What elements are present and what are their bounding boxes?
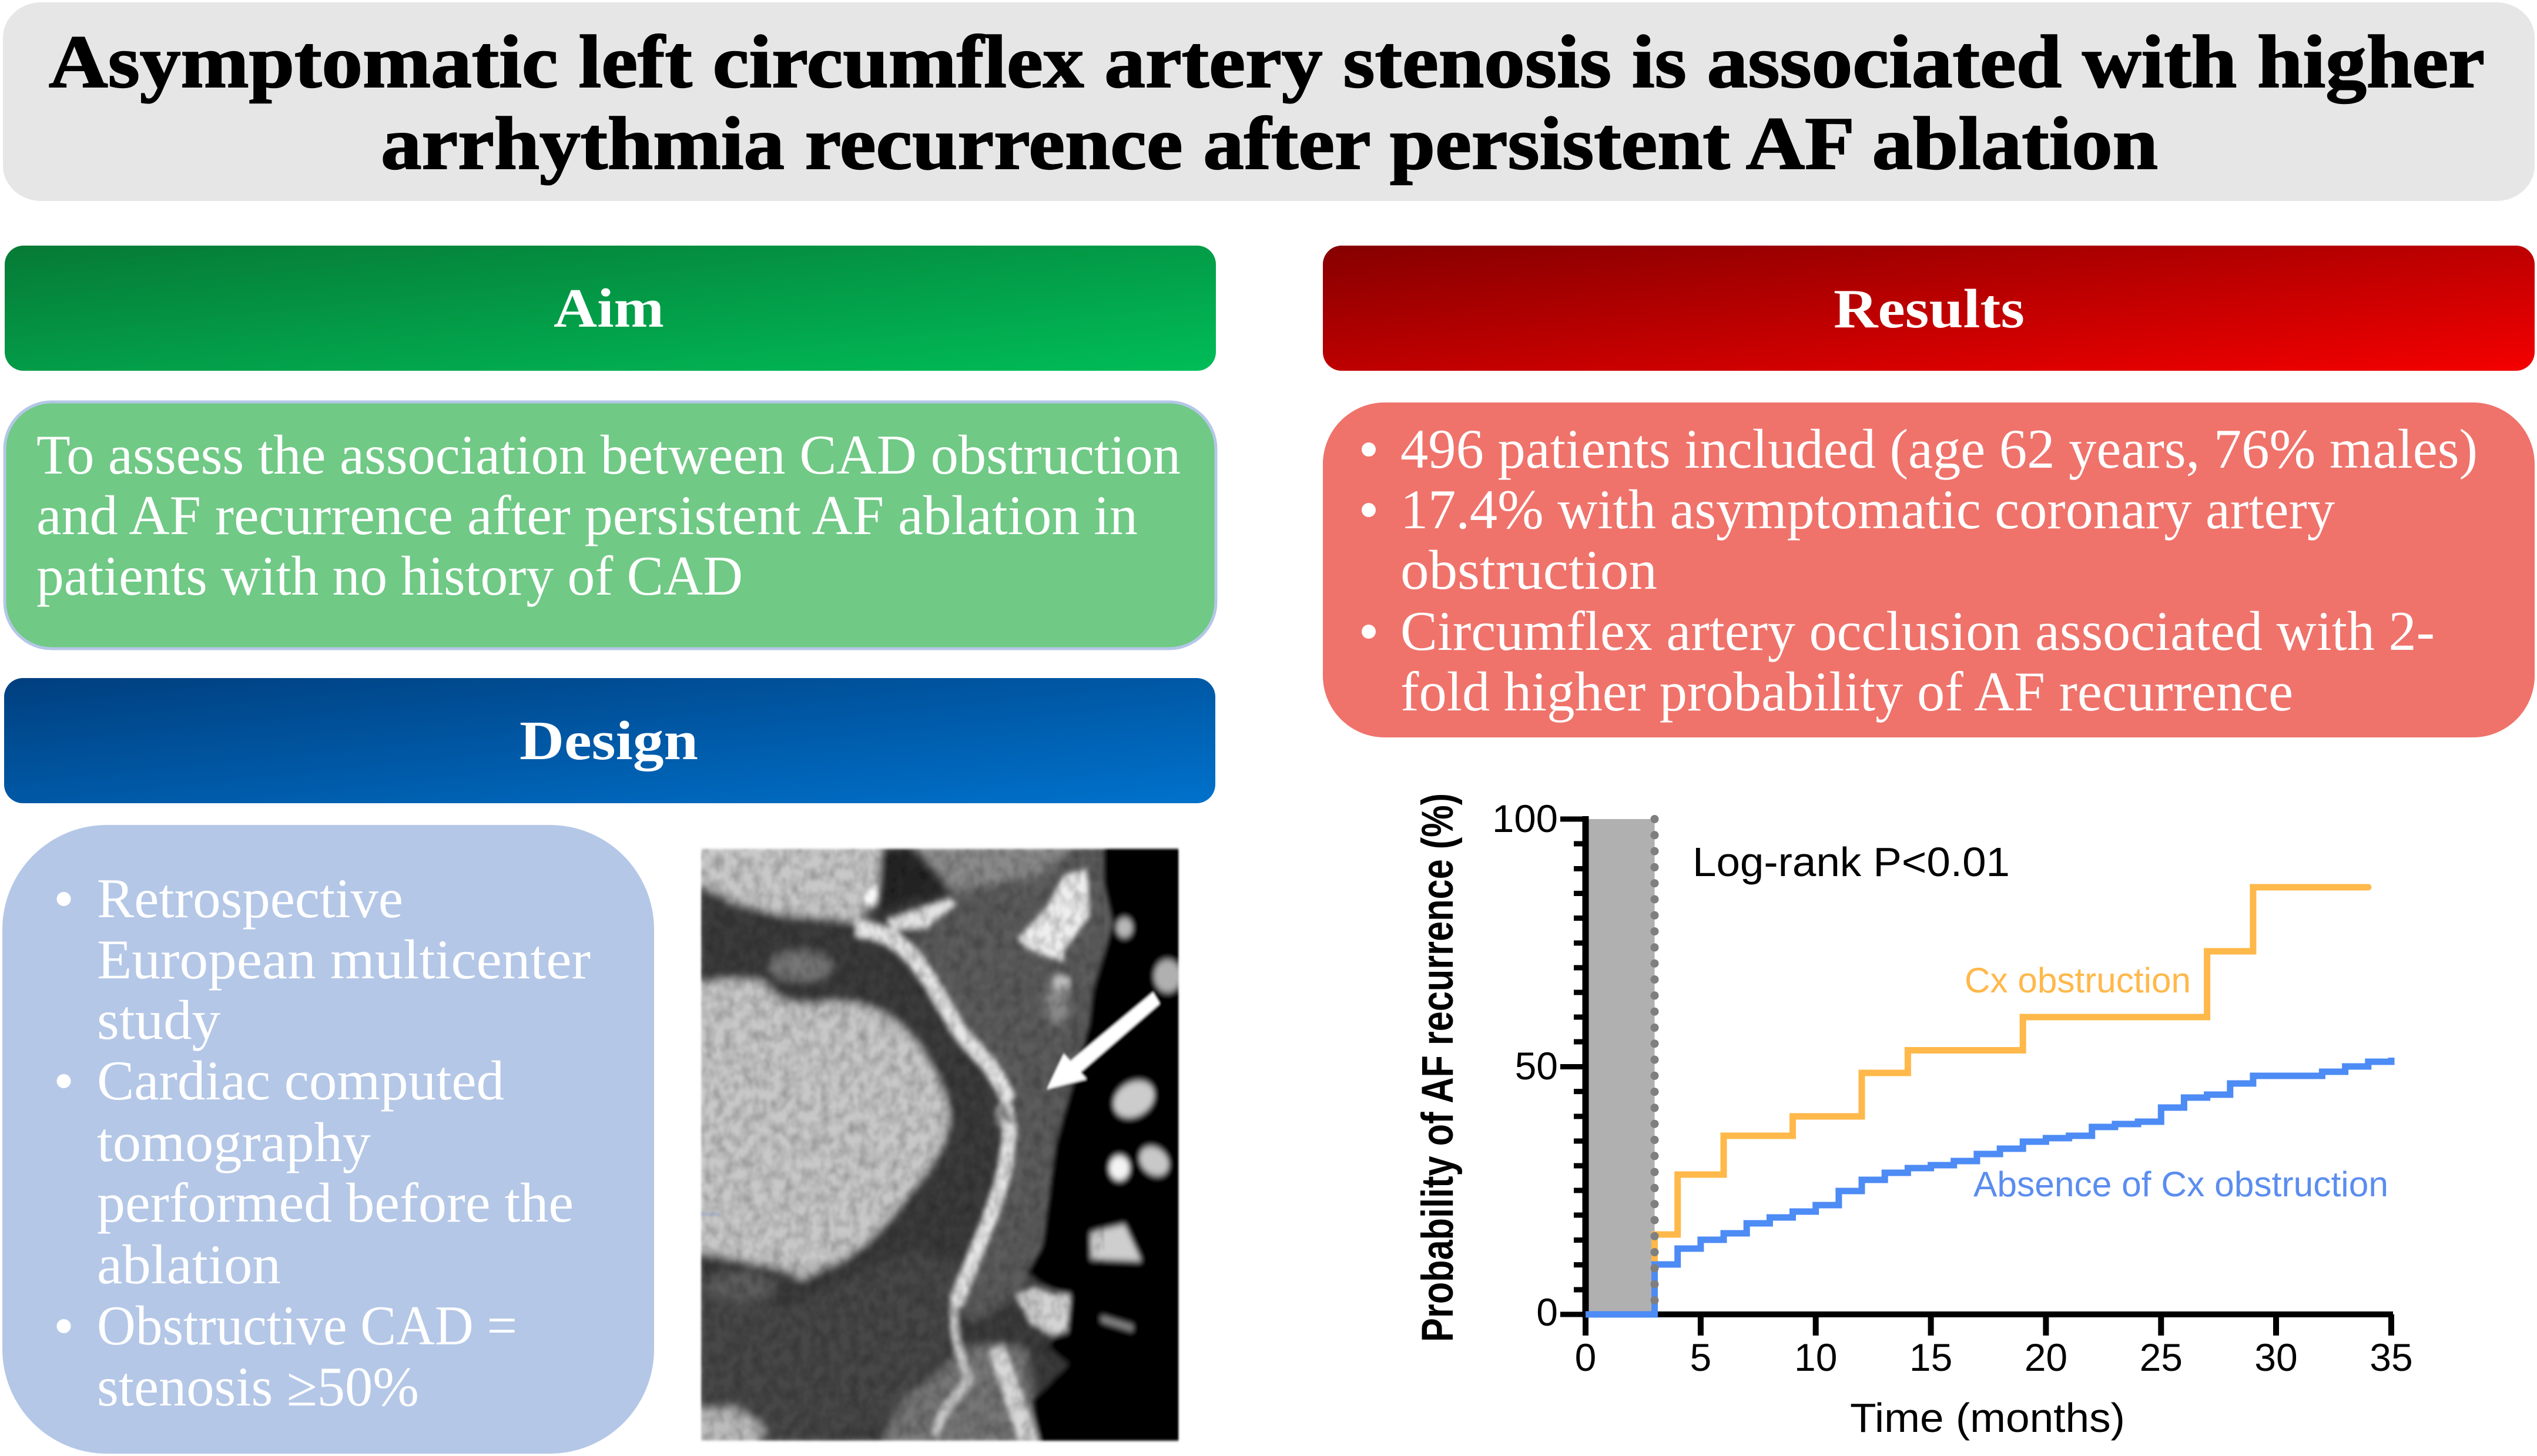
panel: design list: Cardiac computed [97,1049,504,1112]
log-rank annotation: Log-rank P<0.01 [1693,839,2010,885]
shaded blanking period [1586,819,1655,1314]
panel: results text [1323,402,2535,737]
panel: design list: Obstructive CAD = [97,1294,517,1357]
x axis labels [1575,1336,2413,1379]
y axis title: Probability of AF recurrence (%) [1413,793,1463,1342]
heading: Results [1323,246,2535,371]
x axis labels: 25 [2140,1336,2183,1379]
x axis labels: 20 [2025,1336,2067,1379]
x axis labels: 10 [1794,1336,1837,1379]
panel: design list: ablation [97,1233,281,1296]
panel: design list: Retrospective [97,867,403,930]
CT scan image of circumflex artery [699,847,1180,1443]
panel: results text: obstruction [1400,539,1657,601]
panel: aim text: patients with no history of CAD [36,545,743,607]
panel: design list: performed before the [97,1172,574,1234]
heading: Aim: Aim [554,278,664,339]
curve: absence of Cx obstruction [1586,1058,2391,1314]
x axis labels: 15 [1909,1336,1952,1379]
panel: aim text [5,402,1216,649]
dotted line at 3 months [1650,819,1658,1314]
series label: absence of Cx obstruction: Absence of Cx obstruction [1973,1165,2388,1204]
panel: results text: fold higher probability of AF recurrence [1400,660,2293,723]
panel: design list: study [97,989,220,1051]
panel: design list: stenosis ≥50% [97,1356,419,1418]
title banner: Asymptomatic left circumflex artery stenosis is associated with higher [49,20,2485,103]
x axis labels: 0 [1575,1336,1596,1379]
y axis labels: 50 [1515,1044,1558,1088]
heading: Design: Design [520,710,698,771]
x axis labels: 5 [1690,1336,1711,1379]
panel: aim text: and AF recurrence after persistent AF ablation in [36,484,1138,546]
noise texture [701,849,1104,1441]
heading: Design [4,678,1215,803]
panel: aim text: To assess the association between CAD obstruction [36,424,1181,486]
y axis labels [1492,797,1558,1334]
y axis labels: 100 [1492,797,1558,840]
x axis title: Time (months) [1850,1395,2125,1441]
panel: results text: Circumflex artery occlusion associated with 2- [1400,600,2435,662]
curve: Cx obstruction [1655,887,2368,1263]
title banner: arrhythmia recurrence after persistent AF ablation [381,102,2158,185]
series label: Cx obstruction: Cx obstruction [1965,961,2191,1000]
heading: Results: Results [1834,279,2025,340]
panel: design list [2,825,654,1454]
chart: Kaplan-Meier probability of AF recurrence [1413,793,2413,1441]
panel: results text: 17.4% with asymptomatic coronary artery [1400,478,2335,541]
x axis labels: 30 [2254,1336,2298,1379]
heading: Aim [5,246,1216,371]
title banner [3,2,2535,201]
panel: results text: 496 patients included (age 62 years, 76% males) [1400,418,2478,480]
x axis labels: 35 [2370,1336,2413,1379]
y axis labels: 0 [1536,1290,1558,1334]
panel: design list: European multicenter [97,928,591,991]
panel: design list: tomography [97,1111,371,1173]
